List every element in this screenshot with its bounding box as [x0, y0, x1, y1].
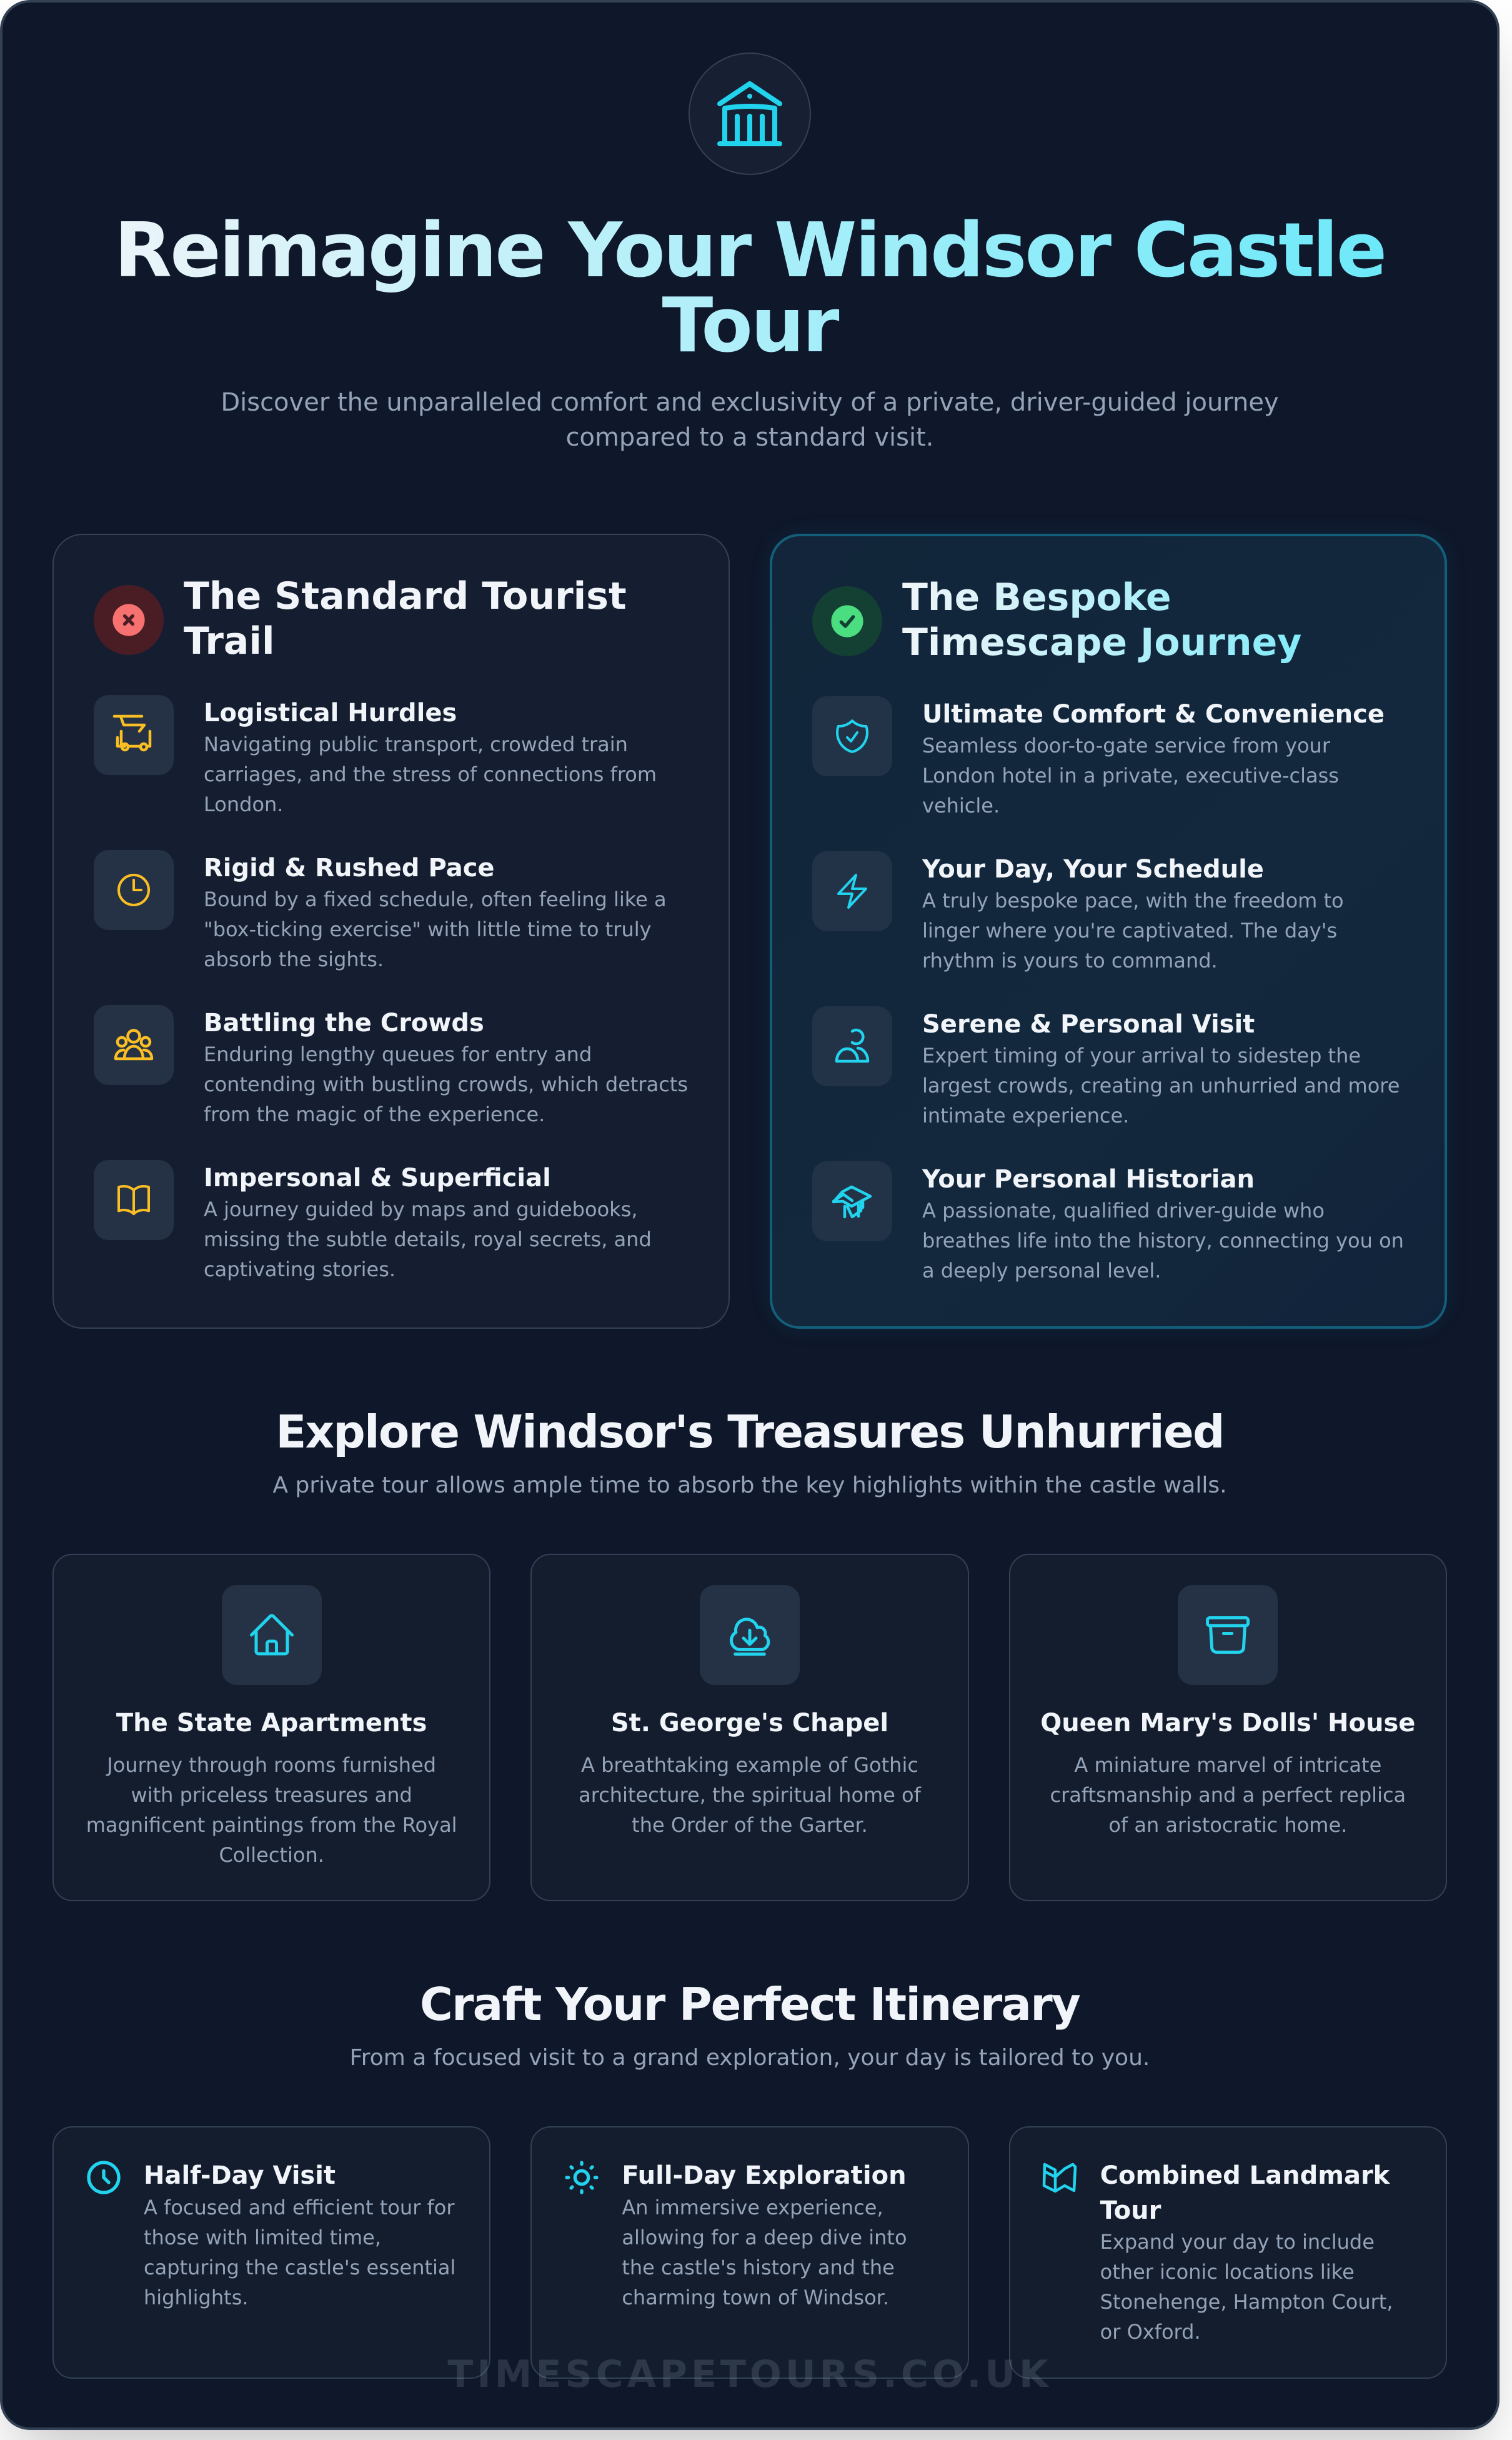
item: your schedule — [812, 851, 1344, 972]
icon: clock — [87, 2161, 121, 2194]
card: st george's chapel: St. George's Chapel — [611, 1709, 888, 1738]
card: half-day visit — [52, 2126, 490, 2379]
item: rigid pace — [94, 850, 667, 971]
section heading: itinerary: Craft Your Perfect Itinerary — [420, 1978, 1080, 2031]
icon: bolt — [812, 851, 892, 931]
card: queen mary's dolls' house: A miniature marvel of intricate craftsmanship and a perfect replica of an aristocratic home. — [1050, 1753, 1406, 1837]
item: serene visit: Expert timing of your arrival to sidestep the largest crowds, creating an unhurried and more intimate experience. — [922, 1044, 1400, 1128]
section subtitle: treasures: A private tour allows ample time to absorb the key highlights within the castle walls. — [272, 1472, 1227, 1498]
icon: person — [812, 1006, 892, 1086]
panel: the bespoke timescape journey — [770, 534, 1447, 1329]
item: impersonal — [94, 1160, 652, 1281]
item: battling crowds — [94, 1005, 688, 1126]
card: queen mary's dolls' house — [1009, 1554, 1447, 1901]
card: combined landmark tour — [1009, 2126, 1447, 2379]
icon: green check badge — [812, 586, 882, 656]
item: battling crowds: Battling the Crowds — [204, 1009, 484, 1038]
panel: the standard tourist trail — [52, 534, 730, 1329]
item: battling crowds: Enduring lengthy queues for entry and contending with bustling crowds, which detracts from the magic of the experience. — [204, 1042, 688, 1126]
icon: shield — [812, 696, 892, 776]
item: impersonal: A journey guided by maps and guidebooks, missing the subtle details, royal secrets, and captivating stories. — [204, 1198, 652, 1281]
icon: map — [1042, 2162, 1077, 2192]
item: rigid pace: Bound by a fixed schedule, often feeling like a "box-ticking exercise" with little time to truly absorb the sights. — [204, 888, 667, 971]
icon: home — [222, 1585, 322, 1685]
item: serene visit — [812, 1006, 1400, 1128]
watermark: TIMESCAPETOURS.CO.UK — [447, 2352, 1052, 2396]
item: ultimate comfort: Seamless door-to-gate service from your London hotel in a private, executive-class vehicle. — [922, 734, 1339, 818]
icon: graduation cap — [812, 1161, 892, 1241]
panel heading: standard: The Standard Tourist Trail — [184, 574, 627, 663]
item: rigid pace: Rigid & Rushed Pace — [204, 854, 495, 882]
card: full-day exploration: An immersive experience, allowing for a deep dive into the castle's history and the charming town of Windsor. — [622, 2196, 907, 2309]
card: combined landmark tour: Expand your day to include other iconic locations like Stonehenge, Hampton Court, or Oxford. — [1100, 2230, 1393, 2344]
item: ultimate comfort: Ultimate Comfort & Convenience — [922, 700, 1385, 729]
item: your schedule: A truly bespoke pace, with the freedom to linger where you're captivated. The day's rhythm is yours to command. — [922, 889, 1344, 972]
card: half-day visit: Half-Day Visit — [144, 2161, 336, 2190]
item: impersonal: Impersonal & Superficial — [204, 1164, 551, 1192]
section heading: treasures: Explore Windsor's Treasures Unhurried — [276, 1406, 1224, 1458]
icon: red cross badge — [94, 585, 164, 655]
item: logistical hurdles: Logistical Hurdles — [204, 699, 457, 728]
item: personal historian — [812, 1161, 1404, 1282]
card: st george's chapel — [530, 1554, 969, 1901]
item: serene visit: Serene & Personal Visit — [922, 1010, 1255, 1039]
icon: cloud download — [700, 1585, 800, 1685]
title: Reimagine Your Windsor Castle Tour — [114, 208, 1385, 369]
card: half-day visit: A focused and efficient tour for those with limited time, capturing the castle's essential highlights. — [144, 2196, 455, 2309]
item: ultimate comfort — [812, 696, 1385, 818]
icon: library building in circle — [689, 52, 811, 175]
icon: cart — [94, 695, 174, 775]
card: state apartments: Journey through rooms furnished with priceless treasures and magnificent paintings from the Royal Collection. — [86, 1753, 457, 1867]
item: logistical hurdles: Navigating public transport, crowded train carriages, and the stress of connections from London. — [204, 732, 657, 816]
card: st george's chapel: A breathtaking example of Gothic architecture, the spiritual home of the Order of the Garter. — [579, 1753, 921, 1837]
card: combined landmark tour: Combined Landmark Tour — [1100, 2161, 1390, 2225]
item: personal historian: A passionate, qualified driver-guide who breathes life into the history, connecting you on a deeply personal level. — [922, 1199, 1404, 1282]
card: full-day exploration: Full-Day Exploration — [622, 2161, 907, 2190]
card: state apartments: The State Apartments — [116, 1709, 427, 1738]
icon: clock — [94, 850, 174, 930]
subtitle: Discover the unparalleled comfort and exclusivity of a private, driver-guided journey compared to a standard visit. — [221, 388, 1279, 452]
panel heading: bespoke: The Bespoke Timescape Journey — [902, 576, 1301, 664]
icon: sun — [565, 2161, 599, 2194]
icon: archive box — [1178, 1585, 1278, 1685]
card: queen mary's dolls' house: Queen Mary's Dolls' House — [1040, 1709, 1415, 1738]
item: personal historian: Your Personal Historian — [922, 1165, 1255, 1194]
section subtitle: itinerary: From a focused visit to a grand exploration, your day is tailored to you. — [350, 2045, 1150, 2071]
card: state apartments — [52, 1554, 490, 1901]
card: full-day exploration — [530, 2126, 969, 2379]
item: your schedule: Your Day, Your Schedule — [922, 855, 1264, 884]
icon: group — [94, 1005, 174, 1085]
icon: book — [94, 1160, 174, 1240]
item: logistical hurdles — [94, 695, 657, 816]
